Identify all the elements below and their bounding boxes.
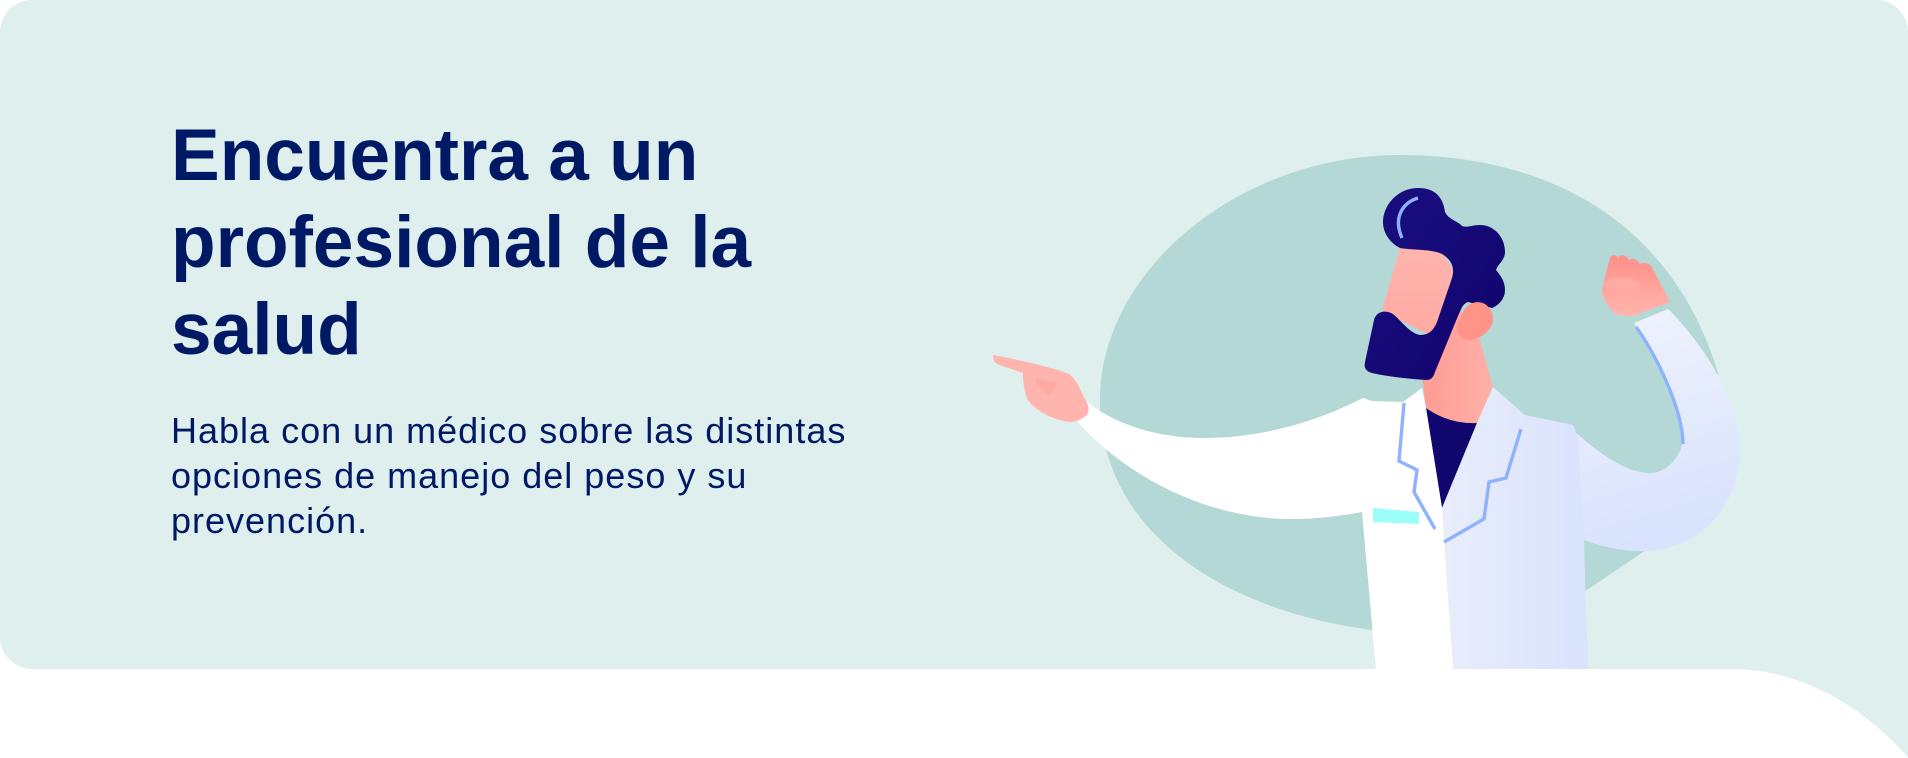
name badge <box>1373 508 1419 524</box>
hair and beard <box>1365 188 1505 380</box>
face <box>1382 247 1455 340</box>
coat right panel <box>1442 387 1588 669</box>
right lapel line <box>1444 429 1521 542</box>
body text <box>171 410 846 541</box>
hair highlight <box>1398 198 1418 238</box>
ear <box>1457 302 1493 340</box>
body text: prevención. <box>171 500 368 541</box>
heading <box>171 115 752 370</box>
pointing hand <box>993 355 1088 422</box>
heading: salud <box>171 289 362 370</box>
body text: Habla con un médico sobre las distintas <box>171 410 846 451</box>
sleeve line <box>1636 327 1683 444</box>
palm detail <box>1035 378 1057 395</box>
raised hand <box>1602 255 1670 316</box>
left lapel line <box>1399 403 1435 529</box>
illustration: doctor pointing <box>993 155 1740 669</box>
heading: profesional de la <box>171 202 752 283</box>
body text: opciones de manejo del peso y su <box>171 455 747 496</box>
shirt <box>1426 408 1477 508</box>
neck <box>1422 310 1493 423</box>
right arm sleeve <box>1575 309 1740 551</box>
background blob <box>1100 155 1718 630</box>
heading: Encuentra a un <box>171 115 698 196</box>
raised hand palm detail <box>1604 278 1640 292</box>
coat left panel and pointing arm <box>1078 388 1453 669</box>
